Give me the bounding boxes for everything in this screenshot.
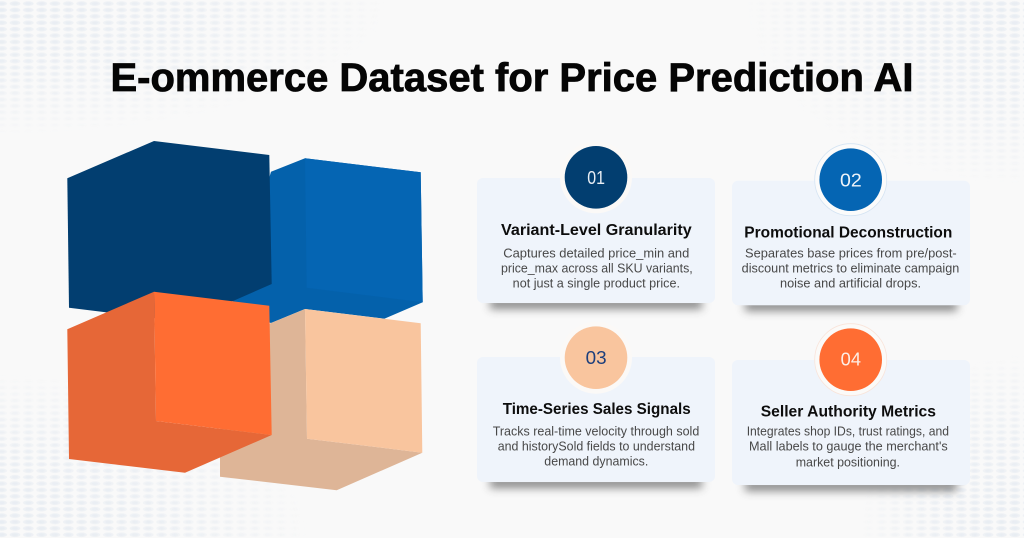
heading: Seller Authority Metrics [761,404,936,421]
description: price_max across all SKU variants, [501,262,693,276]
cube: dark navy [67,141,272,322]
description: demand dynamics. [544,455,648,469]
title: E-ommerce Dataset for Price Prediction AI [110,56,914,100]
badge 01: 01 [587,168,605,188]
description: and historySold fields to understand [498,440,695,454]
description: Mall labels to gauge the merchant's [749,440,948,454]
panel: card 04 [732,324,970,491]
panel: card 03 [477,322,715,488]
panel: card 02 [732,144,970,311]
description: Separates base prices from pre/post- [745,247,957,261]
description [747,425,949,470]
description: Integrates shop IDs, trust ratings, and [747,425,949,439]
cube: blue [230,158,423,323]
badge 02 [815,144,887,216]
description: discount metrics to eliminate campaign [742,262,959,276]
description: noise and artificial drops. [780,277,921,291]
panel: card 01 [477,141,715,309]
description: not just a single product price. [513,277,680,291]
description: market positioning. [796,456,900,470]
description: Captures detailed price_min and [503,247,689,261]
cube: orange [67,292,272,473]
description [493,425,699,469]
description [742,247,959,291]
badge 01 [560,141,632,213]
badge 03 [560,322,632,394]
illustration: stacked cubes [67,141,423,490]
description: Tracks real-time velocity through sold [493,425,699,439]
badge 03: 03 [586,348,607,368]
heading: Time-Series Sales Signals [503,401,691,418]
heading: Promotional Deconstruction [744,224,952,241]
badge 04 [815,324,887,396]
badge 04: 04 [841,350,861,370]
cube: peach [220,309,422,490]
badge 02: 02 [840,171,862,191]
description [501,247,693,291]
heading: Variant-Level Granularity [501,222,692,239]
